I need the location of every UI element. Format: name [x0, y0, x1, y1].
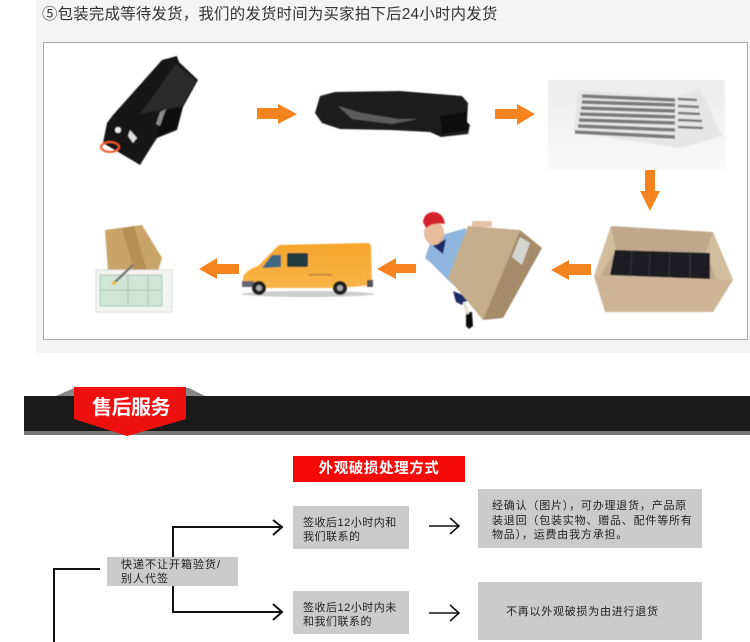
box: no contact within 12 hours — [293, 591, 409, 634]
box: return approved — [478, 489, 702, 548]
banner grey underline — [24, 431, 750, 435]
arrow: upper result — [429, 518, 459, 534]
connector: trunk line — [54, 569, 100, 642]
icon: parcel and waybill — [96, 225, 172, 312]
box: no contact within 12 hours: 和我们联系的 — [303, 616, 372, 628]
box: contact within 12 hours: 签收后12小时内和 — [303, 517, 397, 529]
arrow: step 4 to 5 — [551, 260, 591, 280]
arrow: step 1 to 2 — [257, 104, 297, 124]
heading: damage handling: 外观破损处理方式 — [319, 461, 439, 477]
box: return approved: 物品），运费由我方承担。 — [492, 529, 628, 541]
box: return approved: 经确认（图片），可办理退货，产品原 — [492, 500, 687, 512]
box: courier refuses inspection: 别人代签 — [121, 573, 169, 585]
heading: damage handling — [293, 456, 465, 482]
icon: delivery van — [242, 243, 374, 297]
arrow: step 5 to 6 — [377, 258, 416, 279]
banner black bar — [24, 396, 750, 431]
connector: lower branch — [173, 586, 282, 620]
icon: toner cartridge — [101, 56, 198, 165]
box: return refused — [478, 582, 702, 640]
panel: packaging process background — [36, 0, 750, 353]
banner tab shoulders — [56, 387, 205, 436]
section banner: after-sales service — [24, 387, 750, 436]
arrow: step 3 to 4 — [640, 170, 660, 211]
box: return approved: 装退回（包装实物、赠品、配件等所有 — [492, 514, 693, 526]
icon: air column bag — [548, 80, 725, 170]
arrow: step 2 to 3 — [495, 104, 535, 125]
banner title: 售后服务 — [92, 397, 170, 419]
connector: upper branch — [173, 520, 282, 557]
box: courier refuses inspection: 快递不让开箱验货/ — [121, 559, 221, 571]
box: courier refuses inspection — [107, 557, 238, 586]
arrow: lower result — [429, 605, 459, 621]
box: contact within 12 hours — [293, 506, 409, 549]
panel: packaging steps frame — [43, 42, 748, 340]
icon: courier carrying box — [423, 212, 542, 329]
icon: black plastic bag — [315, 91, 470, 137]
arrow: step 6 to 7 — [199, 258, 239, 279]
box: contact within 12 hours: 我们联系的 — [303, 531, 360, 543]
icon: open carton with cartridges — [594, 226, 733, 312]
box: return refused: 不再以外观破损为由进行退货 — [506, 606, 659, 618]
heading: shipping note: ⑤包装完成等待发货，我们的发货时间为买家拍下后24小时内发货 — [42, 6, 498, 23]
box: no contact within 12 hours: 签收后12小时内未 — [303, 602, 397, 614]
